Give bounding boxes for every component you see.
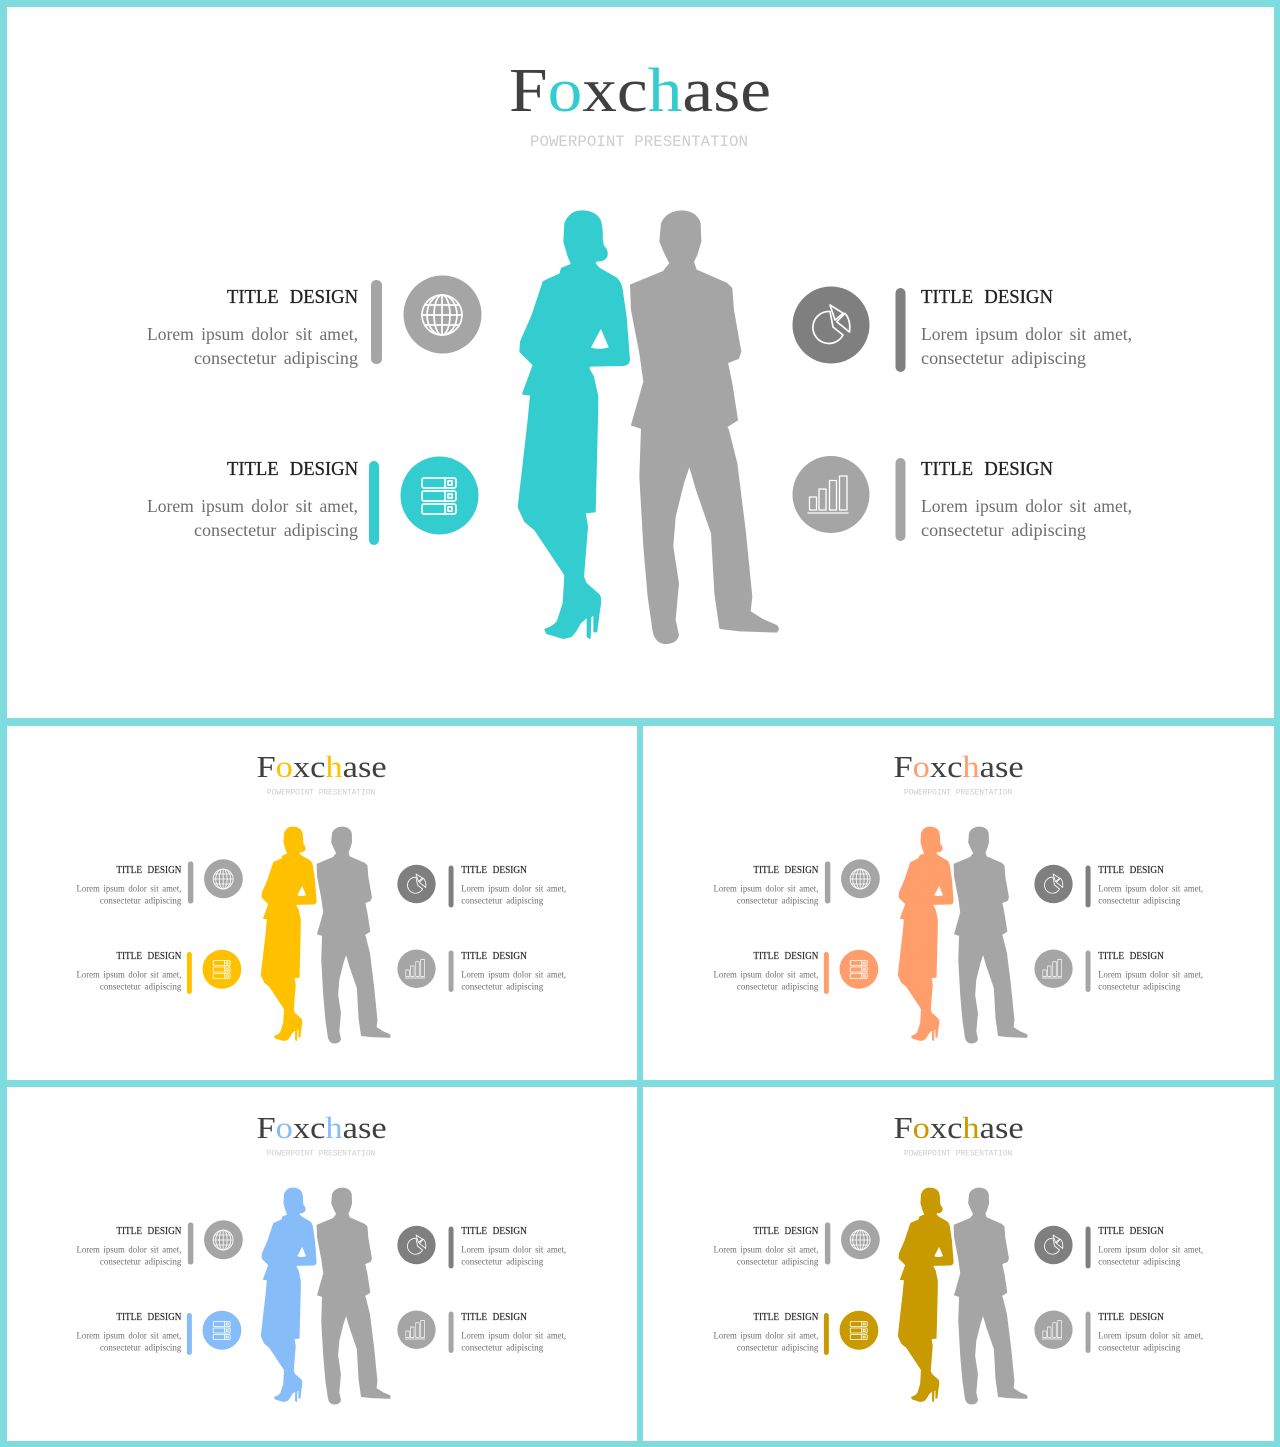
item: server bbox=[714, 1311, 878, 1355]
item: globe: Lorem ipsum dolor sit amet, bbox=[77, 883, 181, 894]
item: bar chart, bottom right: Lorem ipsum dolor sit amet, bbox=[921, 496, 1132, 516]
item: pie chart bbox=[1034, 865, 1203, 908]
silhouette: man bbox=[954, 827, 1027, 1043]
silhouette: woman bbox=[898, 1188, 953, 1402]
item: pie chart, top right bbox=[792, 286, 1132, 372]
item: bar chart: consectetur adipiscing bbox=[461, 981, 544, 992]
item: globe, top left bbox=[147, 276, 482, 368]
item: pie chart bbox=[1034, 1226, 1203, 1268]
item: bar chart, bottom right bbox=[792, 456, 1132, 541]
item: pie chart: TITLE DESIGN bbox=[461, 1226, 527, 1237]
item: pie chart: Lorem ipsum dolor sit amet, bbox=[461, 883, 566, 894]
item: pie chart: TITLE DESIGN bbox=[1098, 1226, 1164, 1237]
item: globe: TITLE DESIGN bbox=[753, 865, 818, 876]
item: server: TITLE DESIGN bbox=[116, 1312, 181, 1323]
panel: small slide, orange bbox=[643, 726, 1274, 1080]
item: globe bbox=[77, 859, 243, 906]
item: pie chart: consectetur adipiscing bbox=[1098, 895, 1181, 906]
item: server: TITLE DESIGN bbox=[753, 1312, 818, 1323]
item: globe: Lorem ipsum dolor sit amet, bbox=[714, 883, 818, 894]
item: bar chart bbox=[1034, 1310, 1203, 1353]
item: server: TITLE DESIGN bbox=[753, 951, 818, 962]
item: pie chart, top right: TITLE DESIGN bbox=[921, 286, 1053, 308]
item: pie chart, top right: consectetur adipiscing bbox=[921, 348, 1086, 368]
item: globe: TITLE DESIGN bbox=[116, 1226, 181, 1237]
item: globe bbox=[714, 1220, 880, 1267]
item: server bbox=[714, 950, 878, 994]
item: server: consectetur adipiscing bbox=[100, 981, 182, 992]
silhouette: man bbox=[317, 827, 390, 1043]
item: globe, top left: Lorem ipsum dolor sit amet, bbox=[147, 324, 358, 344]
subtitle: POWERPOINT PRESENTATION bbox=[267, 1149, 376, 1159]
item: bar chart: consectetur adipiscing bbox=[461, 1342, 544, 1353]
item: globe: consectetur adipiscing bbox=[737, 895, 819, 906]
item: globe, top left: consectetur adipiscing bbox=[194, 348, 358, 368]
item: pie chart: Lorem ipsum dolor sit amet, bbox=[461, 1244, 566, 1255]
item: pie chart: consectetur adipiscing bbox=[1098, 1256, 1181, 1267]
item: globe: consectetur adipiscing bbox=[737, 1256, 819, 1267]
item: server, bottom left bbox=[147, 456, 478, 545]
item: bar chart: Lorem ipsum dolor sit amet, bbox=[461, 1330, 566, 1341]
item: pie chart: TITLE DESIGN bbox=[1098, 865, 1164, 876]
title: Foxchase bbox=[893, 1110, 1024, 1145]
panel: small slide, gold bbox=[643, 1087, 1274, 1441]
item: pie chart bbox=[397, 865, 566, 908]
silhouette: woman bbox=[261, 827, 316, 1041]
item: bar chart: Lorem ipsum dolor sit amet, bbox=[461, 969, 566, 980]
item: server: Lorem ipsum dolor sit amet, bbox=[77, 969, 181, 980]
item: bar chart: TITLE DESIGN bbox=[1098, 1312, 1164, 1323]
item: bar chart: Lorem ipsum dolor sit amet, bbox=[1098, 969, 1203, 980]
silhouette: man bbox=[317, 1188, 390, 1404]
title: Foxchase bbox=[256, 749, 387, 784]
panel: small slide, blue bbox=[7, 1087, 637, 1441]
item: globe: Lorem ipsum dolor sit amet, bbox=[714, 1244, 818, 1255]
item: bar chart bbox=[1034, 950, 1203, 992]
silhouette: man bbox=[954, 1188, 1027, 1404]
title: Foxchase bbox=[509, 57, 771, 125]
panel: small slide, yellow bbox=[7, 726, 637, 1080]
item: bar chart: TITLE DESIGN bbox=[1098, 951, 1164, 962]
subtitle: POWERPOINT PRESENTATION bbox=[530, 133, 748, 151]
item: globe: TITLE DESIGN bbox=[116, 865, 181, 876]
item: server, bottom left: TITLE DESIGN bbox=[227, 458, 358, 480]
item: globe: consectetur adipiscing bbox=[100, 1256, 182, 1267]
item: pie chart, top right: Lorem ipsum dolor sit amet, bbox=[921, 324, 1132, 344]
subtitle: POWERPOINT PRESENTATION bbox=[267, 788, 376, 798]
silhouette: woman bbox=[518, 211, 629, 638]
item: bar chart, bottom right: TITLE DESIGN bbox=[921, 458, 1053, 480]
item: server, bottom left: Lorem ipsum dolor sit amet, bbox=[147, 496, 358, 516]
item: bar chart bbox=[397, 1310, 566, 1353]
silhouette: woman bbox=[261, 1188, 316, 1402]
item: globe: TITLE DESIGN bbox=[753, 1226, 818, 1237]
item: globe: consectetur adipiscing bbox=[100, 895, 182, 906]
item: server: Lorem ipsum dolor sit amet, bbox=[714, 1330, 818, 1341]
item: globe, top left: TITLE DESIGN bbox=[227, 286, 358, 308]
item: server: consectetur adipiscing bbox=[737, 981, 819, 992]
item: pie chart: consectetur adipiscing bbox=[461, 1256, 544, 1267]
item: pie chart: TITLE DESIGN bbox=[461, 865, 527, 876]
item: globe bbox=[77, 1220, 243, 1267]
panel: main slide, teal bbox=[7, 7, 1274, 718]
item: server: Lorem ipsum dolor sit amet, bbox=[714, 969, 818, 980]
item: pie chart bbox=[397, 1226, 566, 1268]
item: server bbox=[77, 950, 241, 994]
item: globe: Lorem ipsum dolor sit amet, bbox=[77, 1244, 181, 1255]
item: server bbox=[77, 1311, 241, 1355]
item: pie chart: Lorem ipsum dolor sit amet, bbox=[1098, 1244, 1203, 1255]
item: pie chart: consectetur adipiscing bbox=[461, 895, 544, 906]
item: bar chart: consectetur adipiscing bbox=[1098, 981, 1181, 992]
silhouette: man bbox=[631, 211, 778, 643]
item: pie chart: Lorem ipsum dolor sit amet, bbox=[1098, 883, 1203, 894]
title: Foxchase bbox=[256, 1110, 387, 1145]
item: bar chart: Lorem ipsum dolor sit amet, bbox=[1098, 1330, 1203, 1341]
item: bar chart: TITLE DESIGN bbox=[461, 951, 527, 962]
item: bar chart: TITLE DESIGN bbox=[461, 1312, 527, 1323]
item: server, bottom left: consectetur adipiscing bbox=[194, 520, 358, 540]
item: server: TITLE DESIGN bbox=[116, 951, 181, 962]
item: server: consectetur adipiscing bbox=[100, 1342, 182, 1353]
item: bar chart bbox=[397, 950, 566, 992]
item: server: consectetur adipiscing bbox=[737, 1342, 819, 1353]
item: server: Lorem ipsum dolor sit amet, bbox=[77, 1330, 181, 1341]
item: bar chart: consectetur adipiscing bbox=[1098, 1342, 1181, 1353]
silhouette: woman bbox=[898, 827, 953, 1041]
subtitle: POWERPOINT PRESENTATION bbox=[904, 1149, 1013, 1159]
subtitle: POWERPOINT PRESENTATION bbox=[904, 788, 1013, 798]
title: Foxchase bbox=[893, 749, 1024, 784]
item: globe bbox=[714, 859, 880, 906]
item: bar chart, bottom right: consectetur adipiscing bbox=[921, 520, 1086, 540]
